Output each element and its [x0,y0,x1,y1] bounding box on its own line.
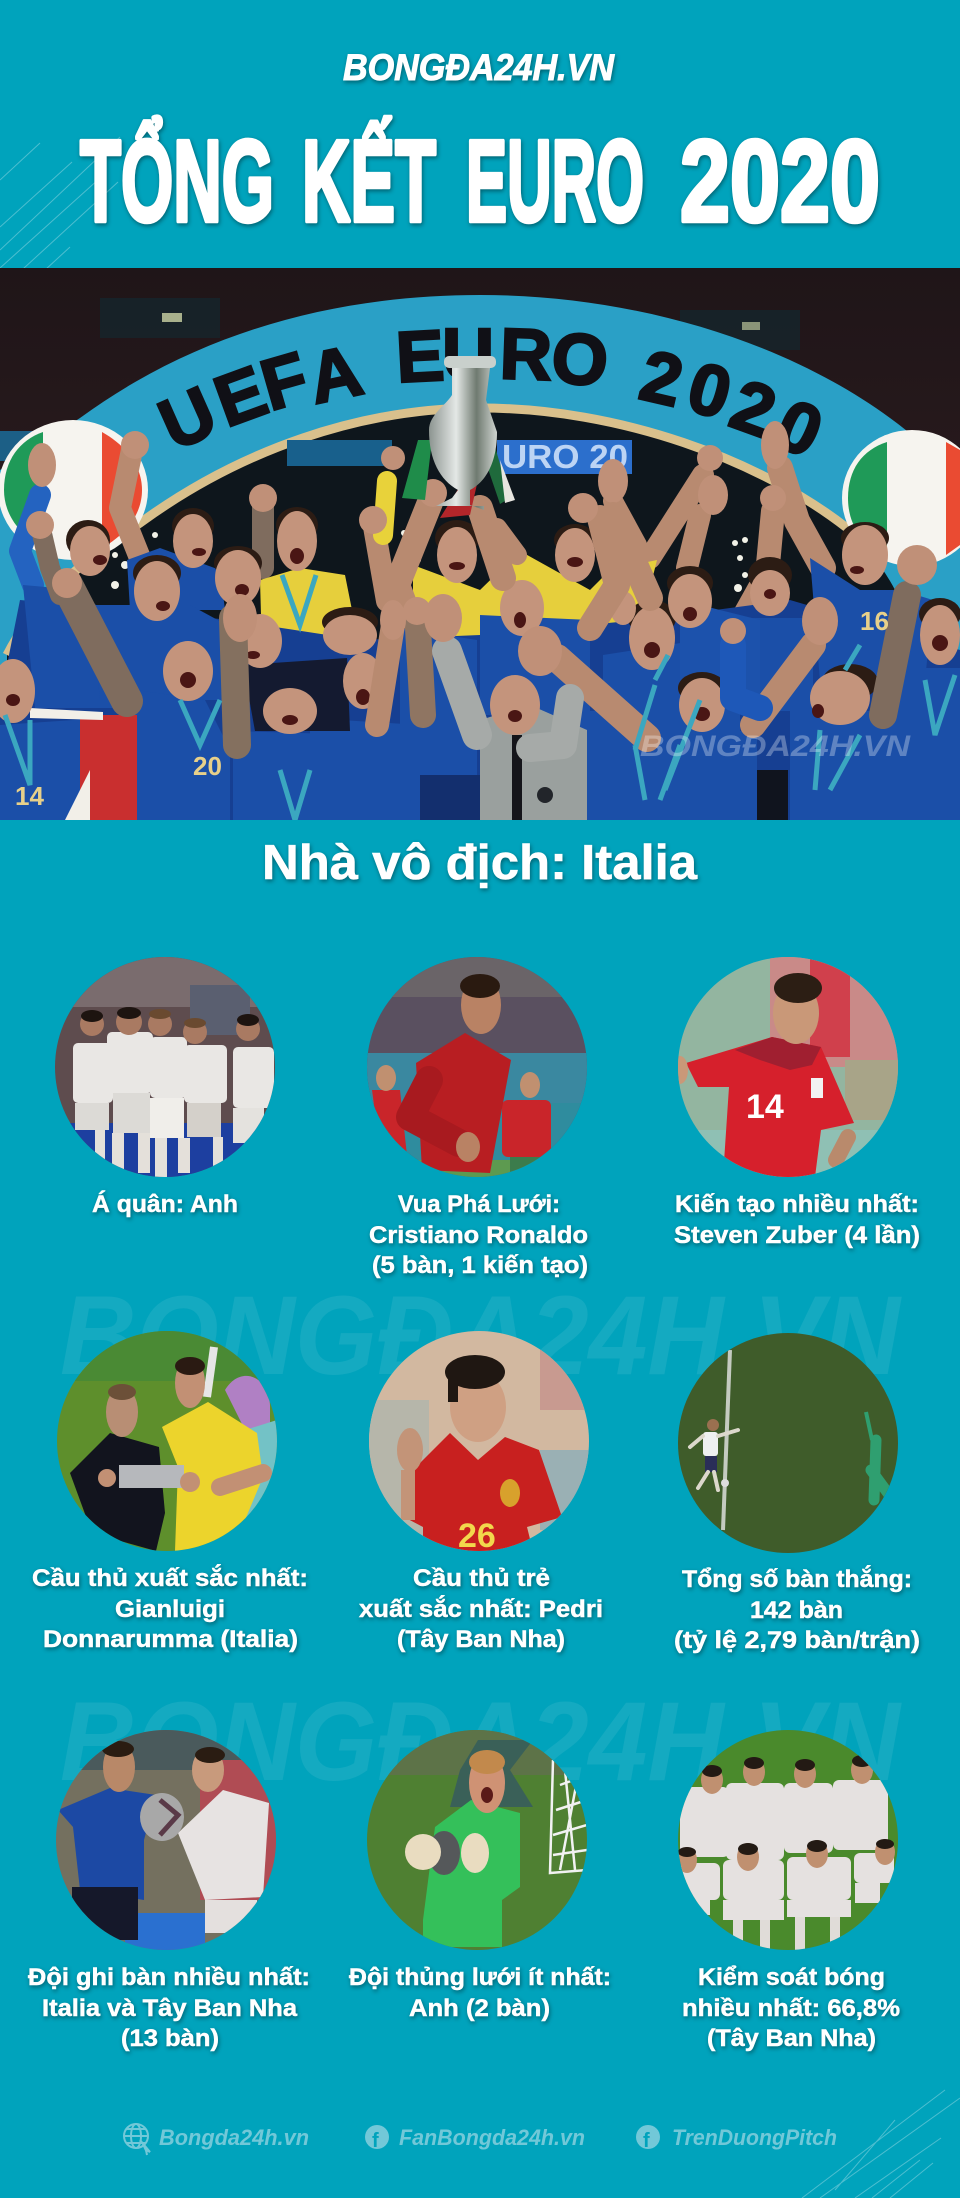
Italian flag right [842,430,960,566]
photo circle: Italy v Spain [56,1730,276,1950]
decorative diagonal lines top left [0,137,120,293]
title: KẾT [302,116,436,246]
arch lettering UEFA EURO 2020: 2 [633,335,690,422]
arch lettering UEFA EURO 2020: E [394,316,446,398]
footer social links: Bongda24h.vn [159,2125,309,2150]
title: TỔNG [80,116,274,246]
arch lettering UEFA EURO 2020: E [204,351,277,443]
raised arms front row [40,495,907,748]
photo circle: Zuber [672,957,898,1177]
stadium opening under arch [7,412,894,660]
raised arms back row [20,445,823,618]
caption: total goals: 142 bàn [750,1597,843,1624]
photo circle: Zuber: 14 [746,1088,784,1126]
shirt numbers: 14 [15,781,44,811]
arch lettering UEFA EURO 2020: R [499,314,553,396]
shirt numbers: 20 [193,751,222,781]
title: 2020 [680,116,880,246]
large watermark row 2: BONGĐA24H.VN [60,1679,902,1804]
medals and ribbons [5,575,955,820]
photo circle: Donnarumma [57,1331,277,1551]
caption: best player: Donnarumma (Italia) [43,1626,298,1653]
photo circle: Pickford [367,1730,587,1950]
caption: best young player: Cầu thủ trẻ [413,1565,550,1592]
hands front row [26,479,937,676]
heading: champion: Nhà vô địch: Italia [262,836,698,890]
caption: possession: (Tây Ban Nha) [707,2025,876,2052]
photo circle: Pedri [369,1331,590,1555]
shirt numbers [15,606,889,811]
icon: facebook second: f [643,2130,650,2152]
arch lettering UEFA EURO 2020 [156,328,821,454]
crowded blue base of squad [0,600,960,820]
caption: fewest conceded: Anh (2 bàn) [409,1995,550,2022]
arch lettering UEFA EURO 2020: 0 [765,384,834,474]
watermark on photo: BONGĐA24H.VN [640,730,912,763]
coach Mancini grey jacket [480,705,587,820]
caption: possession: nhiều nhất: 66,8% [682,1995,900,2022]
caption: top assists [674,1191,920,1249]
title [80,116,880,246]
caption: best player: Gianluigi [115,1596,225,1623]
decorative diagonal lines bottom right [802,2090,960,2198]
photo circle: Ronaldo [367,957,587,1180]
large watermark row 1: BONGĐA24H.VN [60,1273,902,1398]
icon: facebook [365,2125,389,2152]
icon: facebook: f [372,2130,379,2152]
icon: globe with cursor [124,2124,150,2155]
Italian flag left [0,420,148,560]
photo circle: pitch from above [678,1333,898,1553]
caption: total goals: Tổng số bàn thắng: [682,1565,912,1593]
arch board [0,295,960,700]
caption: fewest conceded: Đội thủng lưới ít nhất: [349,1964,611,1991]
trophy with ribbons [402,356,515,518]
video screens [287,440,392,466]
caption: top assists: Steven Zuber (4 lần) [674,1222,920,1249]
caption: top assists: Kiến tạo nhiều nhất: [675,1191,919,1218]
caption: possession: Kiểm soát bóng [698,1964,885,1991]
caption: top scorer: Cristiano Ronaldo [369,1222,588,1249]
caption: runner-up: Á quân: Anh [92,1190,238,1218]
caption: total goals [674,1565,920,1654]
caption: best young player [359,1565,603,1653]
footer social links: TrenDuongPitch [672,2125,837,2150]
caption: fewest conceded [349,1964,611,2022]
arch lettering UEFA EURO 2020: 0 [679,347,740,435]
gold arch trim [7,408,847,655]
caption: best player [32,1564,308,1653]
caption: top scorer [369,1191,588,1279]
stadium lights [111,530,748,592]
caption: best player: Cầu thủ xuất sắc nhất: [32,1564,308,1592]
arch lettering UEFA EURO 2020: F [252,337,317,426]
footer social links: FanBongda24h.vn [399,2125,585,2150]
footer social links [124,2124,837,2155]
hero photo: Italy celebrating with the trophy: URO 20 [502,438,628,475]
caption: possession [682,1964,900,2052]
arch lettering UEFA EURO 2020: A [302,330,369,419]
red and white flag bottom left [30,708,137,820]
brand logo: BONGĐA24H.VN [343,47,615,88]
caption: total goals: (tỷ lệ 2,79 bàn/trận) [674,1627,920,1654]
hero photo: Italy celebrating with the trophy [0,268,960,820]
shirt numbers: 16 [860,606,889,636]
player faces [0,507,960,735]
arch lettering UEFA EURO 2020: O [548,318,611,402]
caption: top scoring team: Italia và Tây Ban Nha [42,1995,298,2022]
caption: top scoring team: (13 bàn) [121,2025,219,2052]
caption: best young player: (Tây Ban Nha) [397,1626,565,1653]
arch lettering UEFA EURO 2020: 2 [721,364,786,453]
hands back row [28,421,789,534]
arch lettering UEFA EURO 2020: U [442,315,494,395]
caption: top scoring team: Đội ghi bàn nhiều nhất: [28,1964,310,1991]
photo circle: England runner-up [55,957,275,1178]
official in dark suit [243,658,350,731]
goalkeepers in yellow [260,555,657,636]
caption: best young player: xuất sắc nhất: Pedri [359,1595,603,1623]
caption: top scorer: Vua Phá Lưới: [398,1191,560,1218]
blue jerseys [0,548,960,820]
photo circle: Pedri: 26 [458,1517,496,1555]
arch lettering UEFA EURO 2020: U [148,372,228,466]
caption: top scoring team [28,1964,310,2052]
title: EURO [466,116,644,246]
photo circle: Spain team [677,1730,898,1950]
caption: top scorer: (5 bàn, 1 kiến tạo) [372,1252,588,1279]
icon: facebook second [636,2125,660,2152]
